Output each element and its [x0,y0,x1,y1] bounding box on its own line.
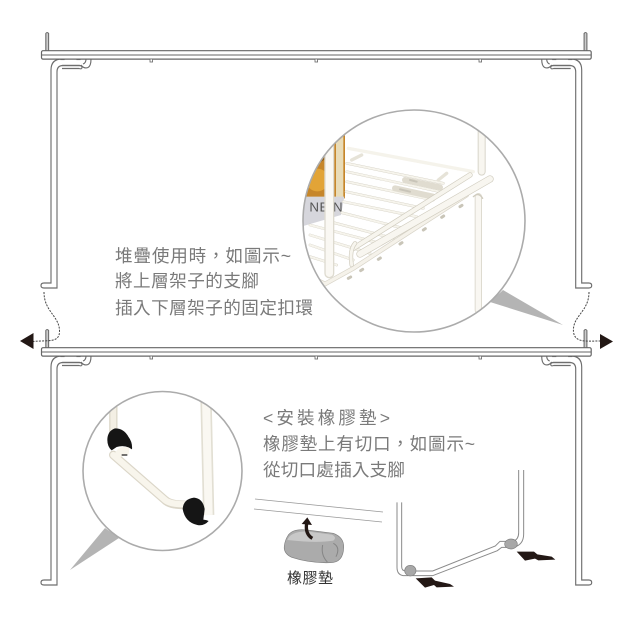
bottom frame [307,195,467,284]
rubber pad label: 橡膠墊 [287,570,333,587]
callout pointer: rubber pad detail [70,528,119,570]
bottom shelf line drawing [41,330,592,585]
stacking instructions text: 堆疊使用時，如圖示~ [115,246,291,266]
stacking instructions text [115,246,313,318]
callout pointer: stacking detail [490,290,563,325]
pad right [505,539,517,549]
icon: rubber pad cylinder with arrow [284,517,344,563]
rubber pad instructions text: <安裝橡膠墊> [263,408,390,428]
front rails [353,175,470,248]
arrow: lower pad [416,577,454,588]
rubber pad instructions text: 從切口處插入支腳 [263,460,405,480]
stacking instructions text: 插入下層架子的固定扣環 [115,298,313,318]
top shelf line drawing [41,32,592,288]
clips [395,180,440,197]
rear post [478,131,486,176]
arrow: upper pad [517,552,555,561]
line drawing: leg with rubber pads [397,470,555,588]
shelf edge lines behind rubber pad [254,499,383,522]
rubber pad instructions text [263,408,475,480]
right dashed guide and arrow [573,292,613,349]
front post [324,144,334,278]
bottle [303,135,345,198]
lower post [474,193,482,312]
rubber pad instructions text: 橡膠墊上有切口，如圖示~ [263,434,475,454]
pad left [405,565,416,576]
callout circle: stacking detail photo: NE N [309,200,343,215]
shelf wires [308,162,445,266]
callout circle: stacking detail photo [303,110,525,332]
stacking instructions text: 將上層架子的支腳 [115,271,259,291]
left dashed guide and arrow [20,292,60,349]
callout circle: rubber pad photo [83,392,242,550]
